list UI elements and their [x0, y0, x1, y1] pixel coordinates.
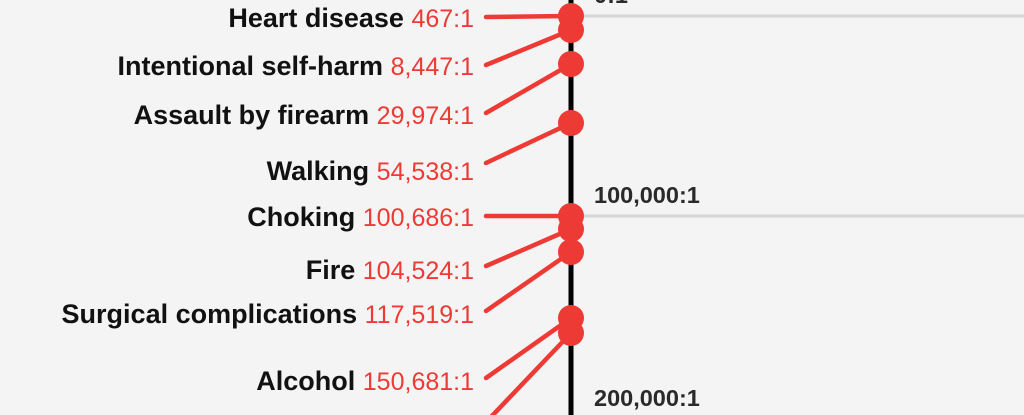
- labels: Walking 54,538:1: [267, 156, 474, 186]
- labels: Assault by firearm 29,974:1: [134, 100, 474, 130]
- labels: [62, 3, 474, 396]
- labels: Fire 104,524:1: [306, 255, 474, 285]
- labels: Intentional self-harm 8,447:1: [118, 51, 474, 81]
- axis labels: [594, 0, 700, 411]
- axis: [568, 0, 574, 415]
- connectors: [486, 16, 571, 415]
- labels: Heart disease 467:1: [228, 3, 474, 33]
- dots: [558, 3, 584, 346]
- axis labels: 200,000:1: [594, 385, 700, 411]
- labels: Alcohol 150,681:1: [256, 366, 474, 396]
- labels: Choking 100,686:1: [247, 202, 474, 232]
- axis labels: 100,000:1: [594, 182, 700, 208]
- labels: Surgical complications 117,519:1: [62, 299, 474, 329]
